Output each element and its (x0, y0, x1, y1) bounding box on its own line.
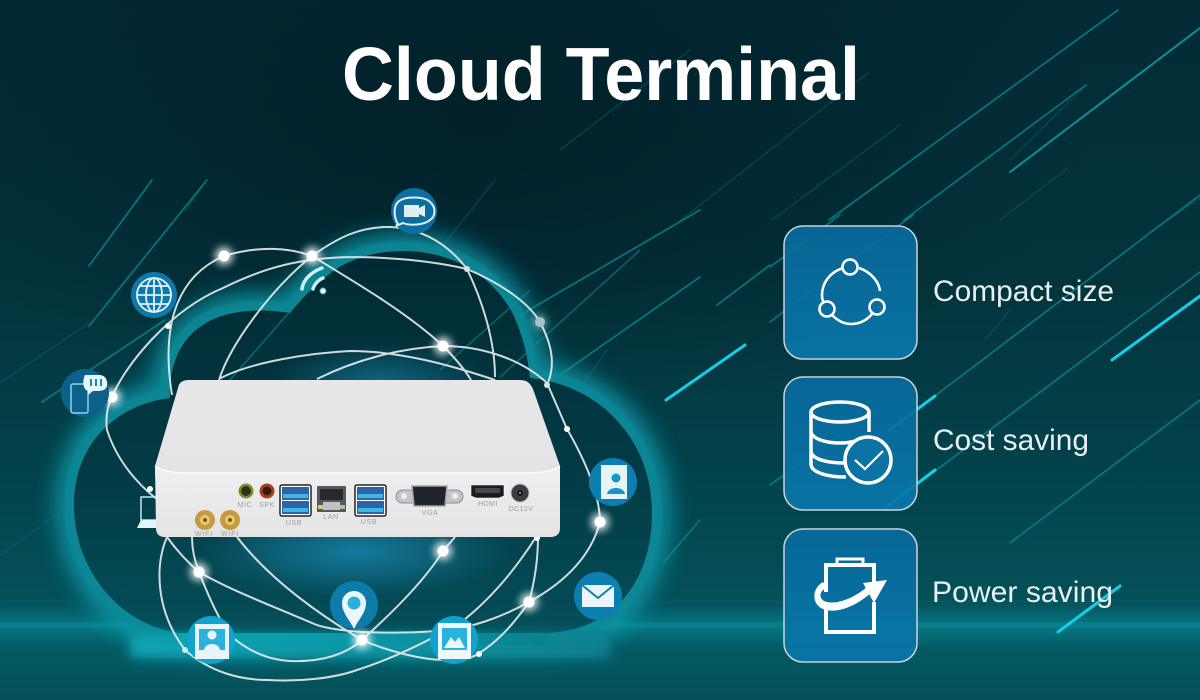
port: USB left: USB (286, 520, 302, 527)
icon: landscape photo (430, 616, 478, 664)
label: Compact size (933, 275, 1114, 308)
port: MIC (238, 484, 254, 509)
label: Cost saving (933, 424, 1089, 457)
port: VGA: VGA (422, 510, 438, 517)
icon: profile photo (187, 616, 235, 664)
port: WiFi antennas (195, 510, 240, 538)
port: VGA (396, 486, 463, 517)
device front panel (155, 466, 560, 537)
mini PC (155, 380, 560, 538)
port: DC12V: DC12V (509, 506, 533, 513)
tile (784, 377, 917, 510)
port: USB left (280, 485, 311, 527)
port: MIC: MIC (238, 502, 252, 509)
icon: mail (574, 572, 622, 620)
device top surface (155, 380, 560, 476)
port: USB right: USB (361, 519, 377, 526)
icon: wifi (302, 268, 326, 294)
port: WiFi antennas: WIFI (195, 531, 213, 538)
network nodes (103, 247, 609, 657)
panel: Power saving (784, 529, 1113, 662)
port: HDMI: HDMI (478, 501, 498, 508)
title: Cloud Terminal (342, 32, 860, 116)
icon: database with check (811, 402, 891, 483)
icon: laptop (137, 497, 160, 528)
port: LAN: LAN (323, 514, 339, 521)
icon: three-node ring (820, 260, 884, 324)
ports (195, 484, 533, 538)
icon: video chat (391, 188, 437, 234)
port: SPK: SPK (259, 502, 275, 509)
label: Power saving (932, 576, 1113, 609)
port: WiFi antennas: WIFI (221, 531, 239, 538)
port: SPK (259, 484, 275, 509)
icon: contact book (589, 458, 637, 506)
port: LAN (317, 486, 346, 521)
tile (784, 529, 917, 662)
panel: Cost saving (784, 377, 1089, 510)
panel: Compact size (784, 226, 1114, 359)
streaks inside the cloud (230, 250, 640, 380)
icon: globe (131, 272, 177, 318)
tile (784, 226, 917, 359)
icon: phone and chat (61, 369, 109, 417)
port: DC12V (509, 484, 533, 513)
port: USB right (355, 485, 386, 526)
cloud glow (74, 251, 652, 658)
icon: location pin (330, 581, 378, 629)
icon: battery with arrow (814, 559, 887, 632)
orbit lines (106, 227, 600, 681)
floor band below the cloud (130, 634, 610, 658)
port: HDMI (471, 485, 504, 508)
